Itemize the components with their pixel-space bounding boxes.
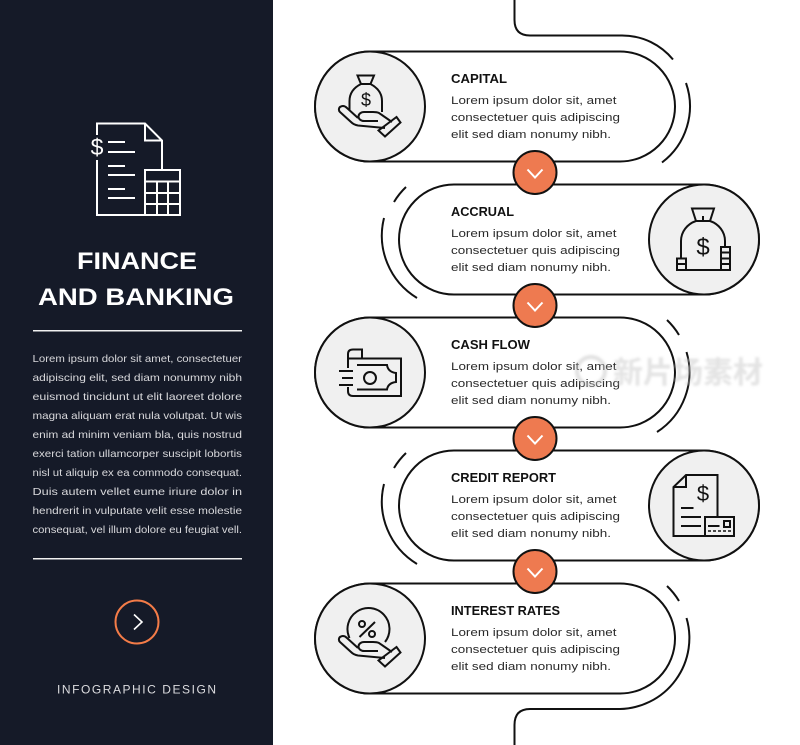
panel: credit report <box>399 450 759 560</box>
text: accrual: elit sed diam nonumy nibh. <box>451 262 611 274</box>
text: cash flow: consectetuer quis adipiscing <box>451 378 620 390</box>
icon: money bag on hand <box>339 76 400 136</box>
text: interest rates: elit sed diam nonumy nibh. <box>451 661 611 673</box>
icon: document with calculator <box>91 124 180 215</box>
text block: sidebar paragraph: Duis autem vellet eume iriure dolor in <box>32 486 242 498</box>
icon: money bag on hand: $ <box>361 90 371 110</box>
panel: cash flow <box>315 318 675 428</box>
heading: finance and banking <box>38 248 234 311</box>
text: accrual: consectetuer quis adipiscing <box>451 245 620 257</box>
icon: document with calculator: $ <box>91 134 104 160</box>
text block: sidebar paragraph: euismod tincidunt ut elit laoreet dolore <box>32 391 242 403</box>
text: interest rates: consectetuer quis adipiscing <box>451 644 620 656</box>
decorative arcs: cash flow <box>657 320 689 432</box>
text: capital: consectetuer quis adipiscing <box>451 112 620 124</box>
text: cash flow: CASH FLOW <box>451 337 531 352</box>
text: accrual <box>451 204 620 274</box>
text: capital: elit sed diam nonumy nibh. <box>451 129 611 141</box>
panel: sidebar <box>0 0 273 745</box>
text block: sidebar paragraph: Lorem ipsum dolor sit amet, consectetuer <box>32 353 243 365</box>
icon: money bag with coins <box>677 208 730 270</box>
text block: sidebar paragraph <box>32 353 243 536</box>
text: accrual: ACCRUAL <box>451 204 514 219</box>
text: credit report: CREDIT REPORT <box>451 470 556 485</box>
text: interest rates <box>451 603 620 673</box>
text: interest rates: Lorem ipsum dolor sit, amet <box>451 627 616 639</box>
panel: capital <box>315 52 675 162</box>
icon: money bag with coins: $ <box>696 234 710 261</box>
icon: arrow button <box>116 600 158 644</box>
icon: credit report document with card <box>674 475 734 536</box>
text: cash flow: elit sed diam nonumy nibh. <box>451 395 611 407</box>
connector line: top <box>514 0 673 60</box>
panel: interest rates <box>315 584 675 694</box>
text: capital: CAPITAL <box>451 71 507 86</box>
caption: infographic design: INFOGRAPHIC DESIGN <box>57 682 216 696</box>
text block: sidebar paragraph: hendrerit in vulputate velit esse molestie <box>32 505 242 517</box>
connector line: bottom <box>514 618 689 745</box>
decorative arc: interest rates <box>667 586 679 601</box>
text: credit report <box>451 470 620 540</box>
heading: finance and banking: FINANCE <box>77 248 197 275</box>
icon: chevron connector 1 <box>514 151 556 194</box>
text block: sidebar paragraph: magna aliquam erat nula volutpat. Ut wis <box>32 410 242 422</box>
text: interest rates: INTEREST RATES <box>451 603 560 618</box>
text: cash flow <box>451 337 620 407</box>
icon: percent coin on hand <box>339 608 400 666</box>
icon: chevron connector 2 <box>514 284 556 327</box>
text block: sidebar paragraph: consequat, vel illum dolore eu feugiat vell. <box>32 524 242 536</box>
icon: credit report document with card: $ <box>697 481 709 506</box>
watermark: 新片场素材 <box>613 357 763 390</box>
heading: finance and banking: AND BANKING <box>38 284 234 311</box>
text: accrual: Lorem ipsum dolor sit, amet <box>451 228 616 240</box>
decorative arcs: accrual <box>382 187 417 298</box>
text: cash flow: Lorem ipsum dolor sit, amet <box>451 361 616 373</box>
icon: chevron connector 3 <box>514 417 556 460</box>
text: credit report: consectetuer quis adipiscing <box>451 511 620 523</box>
decorative arcs: credit report <box>382 453 417 564</box>
text: credit report: elit sed diam nonumy nibh. <box>451 528 611 540</box>
text block: sidebar paragraph: nisl ut aliquip ex ea commodo consequat. <box>32 467 242 479</box>
text block: sidebar paragraph: exerci tation ullamcorper suscipit lobortis <box>32 448 242 460</box>
icon: cash flow banknote <box>339 350 401 396</box>
text block: sidebar paragraph: enim ad minim veniam bla, quis nostrud <box>32 429 242 441</box>
text: capital <box>451 71 620 141</box>
text: capital: Lorem ipsum dolor sit, amet <box>451 95 616 107</box>
text: credit report: Lorem ipsum dolor sit, amet <box>451 494 616 506</box>
text block: sidebar paragraph: adipiscing elit, sed diam nonummy nibh <box>32 372 242 384</box>
icon: chevron connector 4 <box>514 550 556 593</box>
panel: accrual <box>399 184 759 294</box>
decorative arc: capital <box>662 83 690 162</box>
